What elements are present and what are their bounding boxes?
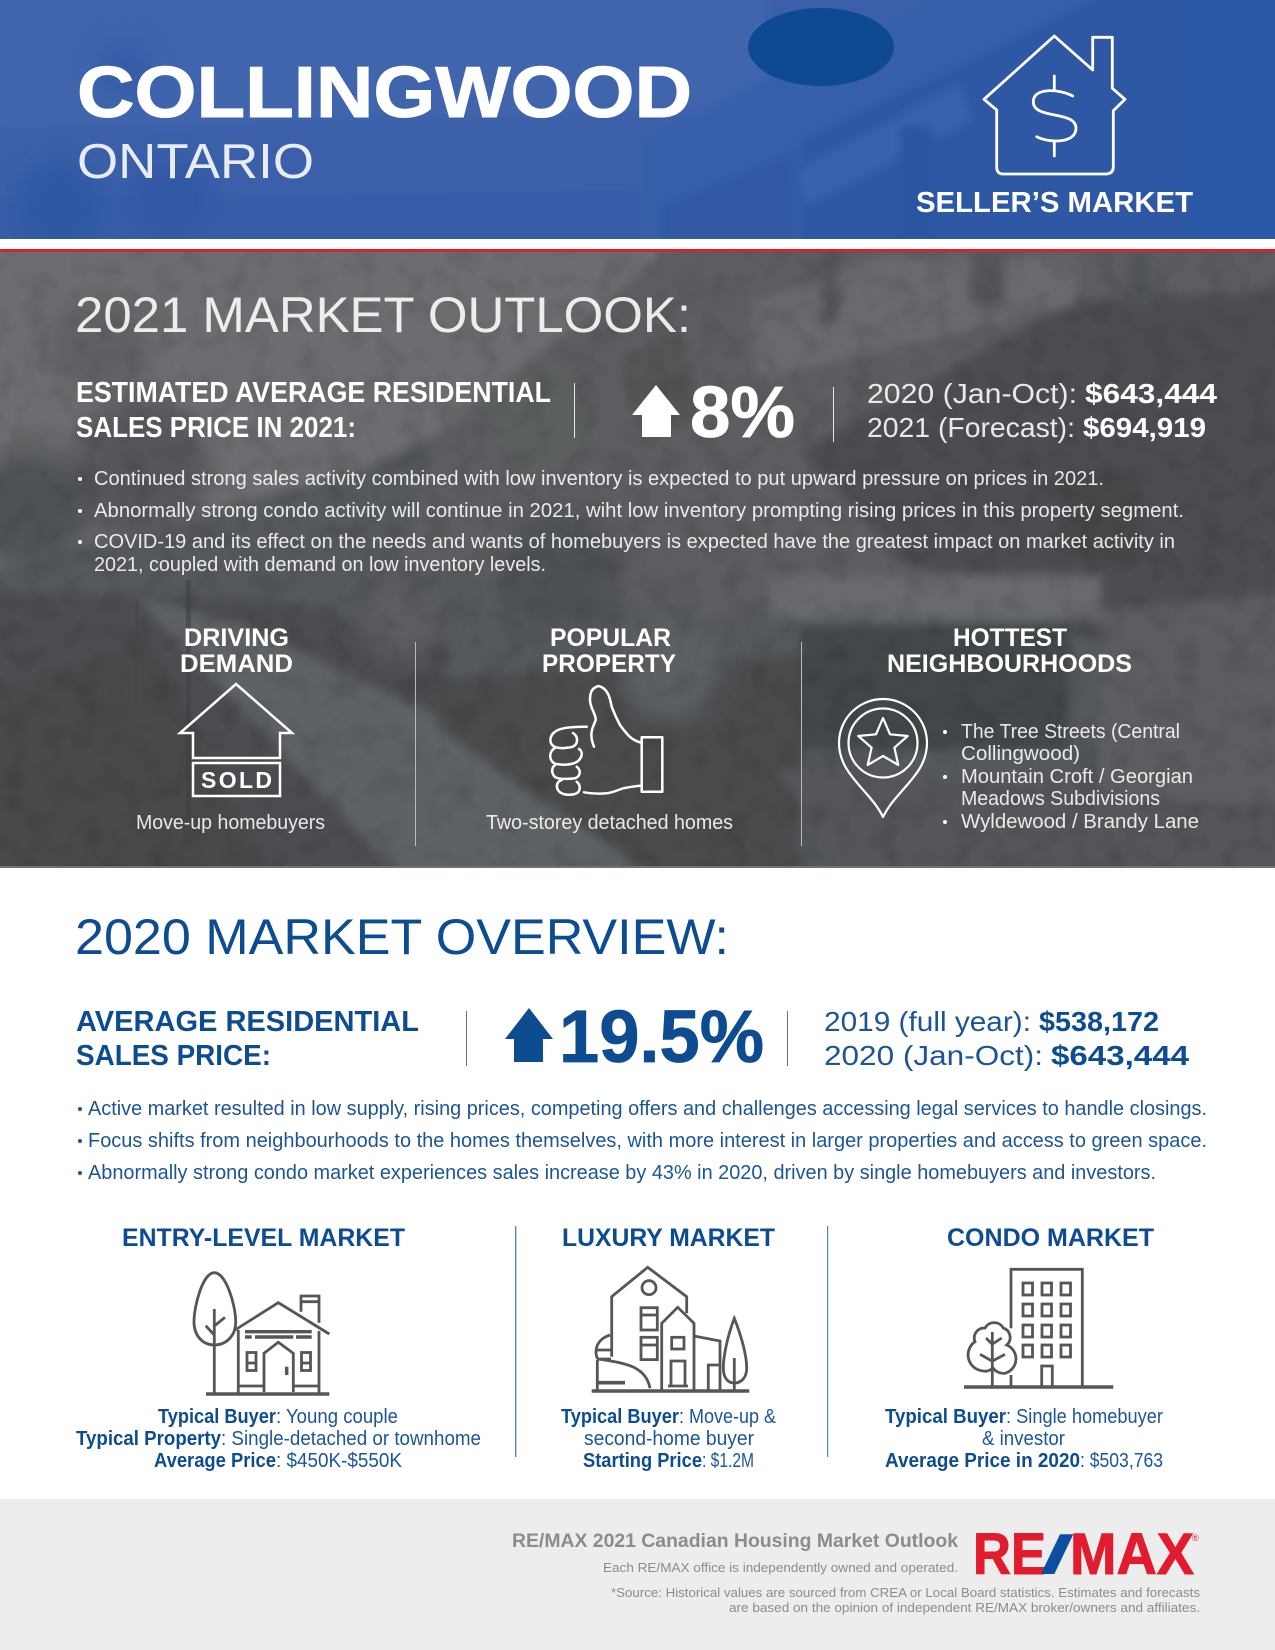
- heading: driving demand: DRIVING: [184, 624, 289, 652]
- heading: 2021 market outlook: 2021 MARKET OUTLOOK:: [75, 287, 691, 343]
- header photo band: [0, 0, 1275, 239]
- divider: [515, 1226, 516, 1457]
- icon: sold house: [180, 684, 292, 796]
- divider: [574, 383, 575, 438]
- neighbourhood list: The Tree Streets (Central: [961, 721, 1180, 743]
- title: Collingwood: COLLINGWOOD: [77, 53, 692, 133]
- heading: popular property: [542, 624, 676, 678]
- RE/MAX logo: MAX: [1070, 1522, 1194, 1587]
- panel: entry-level market: [76, 1224, 481, 1472]
- overview bullet list: Active market resulted in low supply, rising prices, competing offers and challenges accessing legal services to handle closings.: [88, 1098, 1207, 1120]
- outlook bullet list: Abnormally strong condo activity will continue in 2021, wiht low inventory prompting rising prices in this property segment.: [94, 500, 1184, 522]
- arrow up and 8 percent: 8%: [690, 373, 795, 453]
- caption: move-up homebuyers: Move-up homebuyers: [136, 812, 325, 834]
- overview bullet list: [78, 1098, 1207, 1184]
- text: luxury details: Typical Buyer: [561, 1406, 679, 1428]
- text: condo details: : Single homebuyer: [1006, 1406, 1163, 1428]
- text: condo details: : $503,763: [1080, 1450, 1163, 1472]
- RE/MAX logo: [973, 1522, 1199, 1587]
- text: entry-level details: : Single-detached or townhome: [221, 1428, 481, 1450]
- text: entry-level details: : Young couple: [276, 1406, 398, 1428]
- text: luxury details: second-home buyer: [584, 1428, 754, 1450]
- divider: [787, 1011, 788, 1066]
- text: luxury details: [561, 1406, 777, 1472]
- price comparison 2020 and 2021: [867, 378, 1217, 443]
- block: average residential sales price: AVERAGE RESIDENTIAL: [76, 1006, 419, 1038]
- heading: popular property: PROPERTY: [542, 650, 676, 678]
- block: estimated average residential sales price: SALES PRICE IN 2021:: [76, 412, 356, 444]
- panel: condo market: [885, 1224, 1163, 1472]
- heading: driving demand: [180, 624, 293, 678]
- arrow up and 8 percent: [632, 373, 795, 453]
- icon: sold house: SOLD: [201, 767, 272, 793]
- caption: two-storey detached homes: Two-storey detached homes: [486, 812, 733, 834]
- divider: [466, 1011, 467, 1066]
- price comparison 2019 and 2020: $538,172: [1039, 1006, 1159, 1037]
- heading: hottest neighbourhoods: HOTTEST: [953, 624, 1067, 652]
- text: entry-level details: : $450K-$550K: [276, 1450, 403, 1472]
- source note: *Source: Historical values are sourced from CREA or Local Board statistics. Estimates and forecasts: [611, 1585, 1201, 1600]
- overview bullet list: Focus shifts from neighbourhoods to the homes themselves, with more interest in larger properties and access to green space.: [88, 1130, 1207, 1152]
- divider: [801, 642, 802, 846]
- price comparison 2020 and 2021: $694,919: [1083, 412, 1206, 443]
- icon: thumbs up: [550, 686, 662, 795]
- panel: 2021 market outlook background photo: [0, 252, 1275, 868]
- text: entry-level details: Typical Buyer: [158, 1406, 276, 1428]
- outlook bullet list: 2021, coupled with demand on low inventory levels.: [94, 554, 546, 576]
- outlook bullet list: COVID-19 and its effect on the needs and wants of homebuyers is expected have the greatest impact on market activity in: [94, 531, 1175, 553]
- price comparison 2019 and 2020: 2020 (Jan-Oct):: [824, 1040, 1043, 1071]
- text: entry-level details: Average Price: [154, 1450, 276, 1472]
- red and white divider: [0, 239, 1275, 252]
- text: condo details: Typical Buyer: [885, 1406, 1006, 1428]
- price comparison 2019 and 2020: $643,444: [1051, 1040, 1189, 1071]
- source note: [611, 1585, 1201, 1615]
- footer note: Each RE/MAX office is independently owned and operated.: [603, 1560, 958, 1575]
- block: average residential sales price: SALES PRICE:: [76, 1040, 271, 1072]
- outlook bullet list: Continued strong sales activity combined with low inventory is expected to put upward pressure on prices in 2021.: [94, 468, 1104, 490]
- price comparison 2019 and 2020: 2019 (full year):: [824, 1006, 1031, 1037]
- RE/MAX logo: ®: [1192, 1533, 1199, 1543]
- source note: are based on the opinion of independent RE/MAX broker/owners and affiliates.: [729, 1600, 1200, 1615]
- heading: luxury market: LUXURY MARKET: [562, 1224, 775, 1252]
- price comparison 2020 and 2021: 2020 (Jan-Oct):: [867, 378, 1077, 409]
- RE/MAX logo: RE: [973, 1522, 1046, 1587]
- neighbourhood list: [943, 721, 1199, 833]
- text: luxury details: : Move-up &: [679, 1406, 777, 1428]
- text: luxury details: Starting Price: [583, 1450, 702, 1472]
- footer band: [0, 1499, 1275, 1650]
- heading: hottest neighbourhoods: NEIGHBOURHOODS: [887, 650, 1132, 678]
- text: condo details: Average Price in 2020: [885, 1450, 1080, 1472]
- icon: house with dollar sign: [984, 36, 1125, 174]
- divider: [833, 387, 834, 442]
- neighbourhood list: Collingwood): [961, 743, 1080, 765]
- text: condo details: [885, 1406, 1163, 1472]
- price comparison 2019 and 2020: [824, 1006, 1189, 1071]
- block: estimated average residential sales price: [76, 377, 551, 444]
- footer title: RE/MAX 2021 Canadian Housing Market Outlook: [512, 1531, 958, 1552]
- icon: map pin with star: [839, 699, 927, 817]
- icon: condo building and tree: [964, 1269, 1113, 1387]
- neighbourhood list: Wyldewood / Brandy Lane: [961, 811, 1199, 833]
- heading: 2020 market overview: 2020 MARKET OVERVIEW:: [75, 909, 729, 965]
- price comparison 2020 and 2021: $643,444: [1085, 378, 1217, 409]
- heading: condo market: CONDO MARKET: [947, 1224, 1154, 1252]
- neighbourhood list: Mountain Croft / Georgian: [961, 766, 1193, 788]
- outlook bullet list: [78, 468, 1184, 576]
- icon: house and tree: [194, 1273, 329, 1394]
- heading: popular property: POPULAR: [550, 624, 671, 652]
- subtitle: Ontario: ONTARIO: [77, 135, 314, 189]
- heading: driving demand: DEMAND: [180, 650, 293, 678]
- text: condo details: & investor: [982, 1428, 1065, 1450]
- neighbourhood list: Meadows Subdivisions: [961, 788, 1160, 810]
- label: seller's market: SELLER’S MARKET: [916, 187, 1193, 219]
- text: luxury details: : $1.2M: [702, 1450, 754, 1472]
- divider: [415, 642, 416, 846]
- arrow up and 19.5 percent: 19.5%: [559, 995, 764, 1078]
- price comparison 2020 and 2021: 2021 (Forecast):: [867, 412, 1075, 443]
- heading: entry-level market: ENTRY-LEVEL MARKET: [122, 1224, 405, 1252]
- divider: [827, 1226, 828, 1457]
- text: entry-level details: [76, 1406, 481, 1472]
- overview bullet list: Abnormally strong condo market experiences sales increase by 43% in 2020, driven by single homebuyers and investors.: [88, 1162, 1156, 1184]
- text: entry-level details: Typical Property: [76, 1428, 222, 1450]
- heading: hottest neighbourhoods: [887, 624, 1132, 678]
- icon: large house and tree: [592, 1267, 749, 1391]
- block: estimated average residential sales price: ESTIMATED AVERAGE RESIDENTIAL: [76, 377, 551, 409]
- panel: luxury market: [561, 1224, 777, 1472]
- block: average residential sales price: [76, 1006, 419, 1072]
